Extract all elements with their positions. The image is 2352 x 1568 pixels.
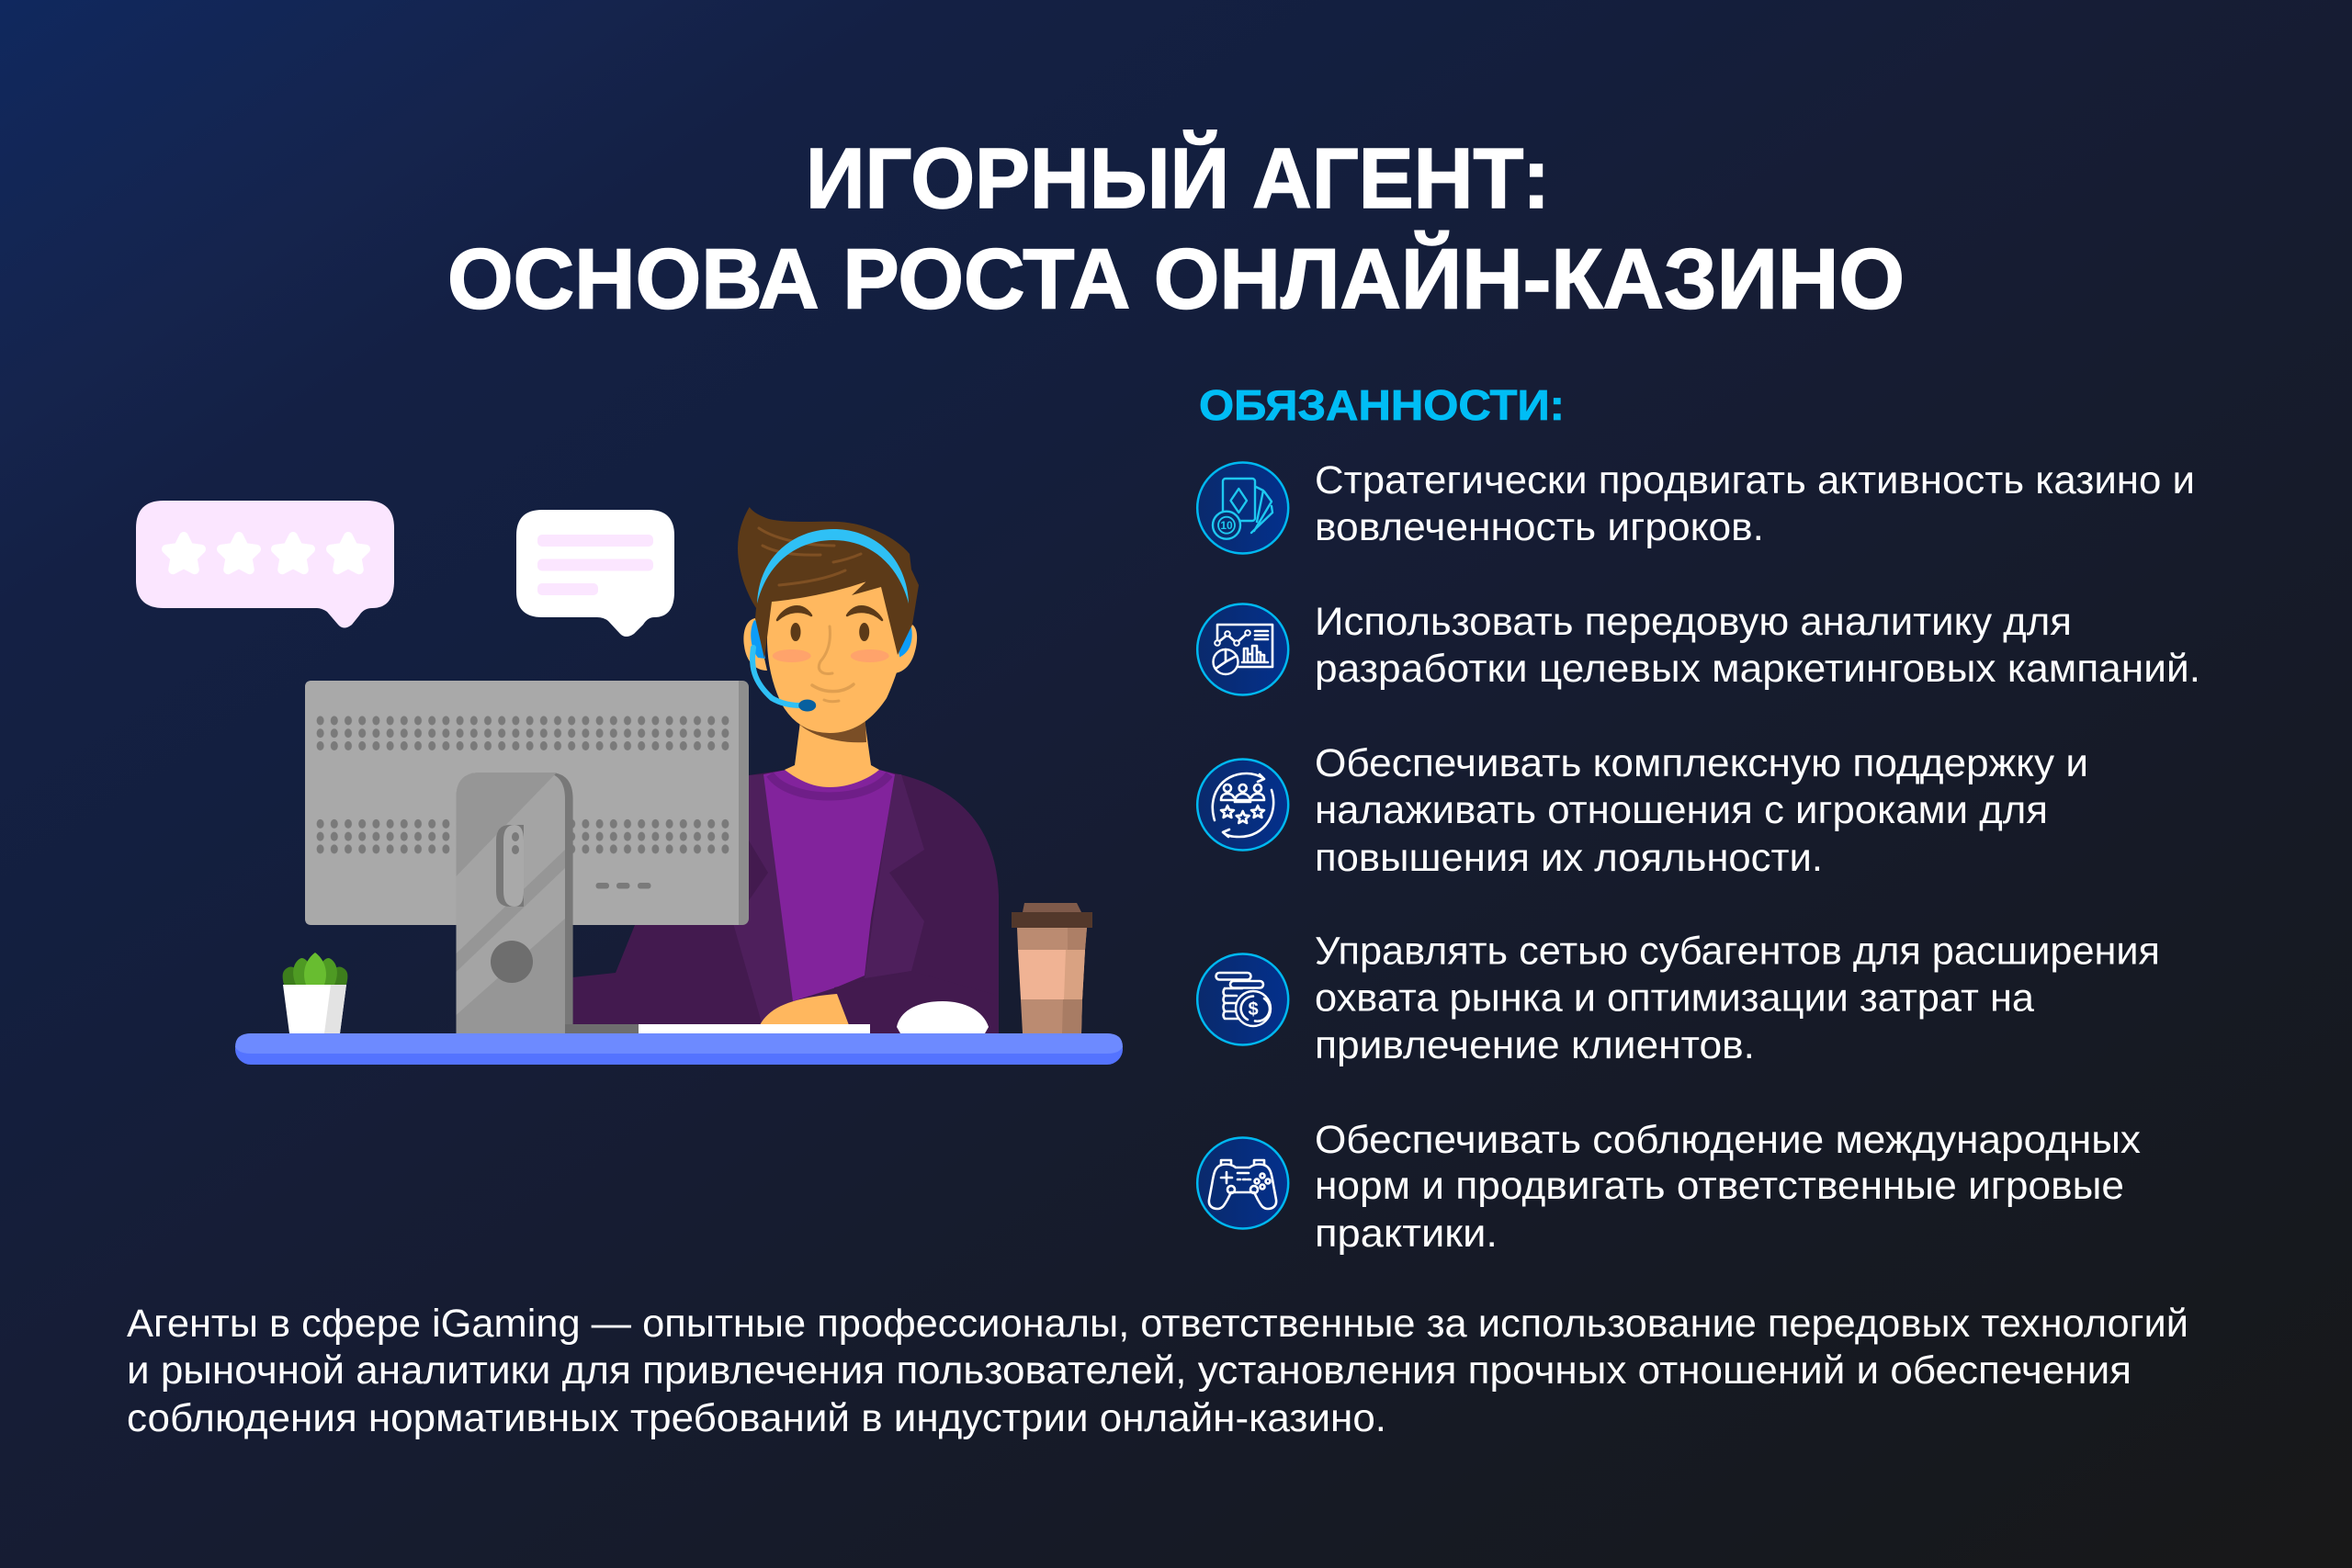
text: Обеспечивать соблюдение международных <box>1315 1118 2142 1162</box>
bottom description: Агенты в сфере iGaming — опытные профессионалы, ответственные за использование передовых технологий <box>127 1302 2188 1346</box>
text: налаживать отношения с игроками для <box>1315 788 2048 832</box>
list item 5 <box>1197 1118 2142 1256</box>
text: Обеспечивать комплексную поддержку и <box>1315 741 2088 785</box>
hair <box>738 507 919 659</box>
text <box>1315 930 2160 1067</box>
icon: game controller <box>1197 1137 1288 1229</box>
icon: cards and chip: 10 <box>1220 519 1233 532</box>
text: вовлеченность игроков. <box>1315 505 1764 549</box>
mouse <box>897 1001 989 1033</box>
text <box>1315 741 2088 880</box>
text: привлечение клиентов. <box>1315 1023 1755 1067</box>
text: Управлять сетью субагентов для расширения <box>1315 930 2160 974</box>
t-shirt <box>763 770 895 1001</box>
desk <box>235 1033 1123 1065</box>
arm and hand <box>760 971 999 1033</box>
icon: coins <box>1197 953 1288 1045</box>
icon: coins: $ <box>1248 999 1259 1020</box>
text <box>1315 600 2200 691</box>
icon: cards and chip <box>1197 463 1288 553</box>
title: ИГОРНЫЙ АГЕНТ: <box>806 130 1550 226</box>
neck shadow <box>800 718 866 742</box>
jacket lapels <box>733 774 924 1026</box>
neck <box>785 724 879 787</box>
icon: analytics board <box>1197 604 1288 694</box>
list item 4 <box>1197 930 2160 1067</box>
t-shirt collar shade <box>770 774 889 796</box>
title: ОСНОВА РОСТА ОНЛАЙН-КАЗИНО <box>447 231 1905 327</box>
text: разработки целевых маркетинговых кампаний. <box>1315 647 2200 691</box>
text: повышения их лояльности. <box>1315 836 1823 880</box>
speech bubble: text lines <box>516 510 674 637</box>
text: практики. <box>1315 1212 1498 1256</box>
monitor base <box>565 1024 640 1033</box>
headset <box>752 529 909 711</box>
text <box>1315 1118 2142 1256</box>
facial features <box>773 606 889 702</box>
text: Стратегически продвигать активность казино и <box>1315 458 2195 502</box>
list item 2 <box>1197 600 2200 694</box>
coffee cup <box>1012 903 1092 1033</box>
plant <box>283 953 347 1033</box>
icon: players and stars <box>1197 759 1288 851</box>
bottom description: соблюдения нормативных требований в индустрии онлайн-казино. <box>127 1396 1386 1440</box>
monitor stand <box>456 773 573 1033</box>
text: охвата рынка и оптимизации затрат на <box>1315 976 2034 1020</box>
face <box>767 579 900 733</box>
keyboard <box>639 1024 870 1033</box>
heading: responsibilities: ОБЯЗАННОСТИ: <box>1199 381 1565 429</box>
jacket <box>573 770 999 1033</box>
text <box>1315 458 2195 549</box>
monitor <box>305 681 749 925</box>
list item 3 <box>1197 741 2088 880</box>
bottom description <box>127 1302 2188 1440</box>
bottom description: и рыночной аналитики для привлечения пользователей, установления прочных отношений и обеспечения <box>127 1348 2132 1393</box>
list item 1 <box>1197 458 2195 553</box>
text: норм и продвигать ответственные игровые <box>1315 1164 2124 1208</box>
illustration: agent at computer <box>136 501 1123 1065</box>
agent figure <box>573 507 999 1033</box>
text: Использовать передовую аналитику для <box>1315 600 2072 644</box>
speech bubble: star rating <box>136 501 394 628</box>
title <box>447 130 1905 327</box>
ears and headphone pads <box>743 618 917 673</box>
